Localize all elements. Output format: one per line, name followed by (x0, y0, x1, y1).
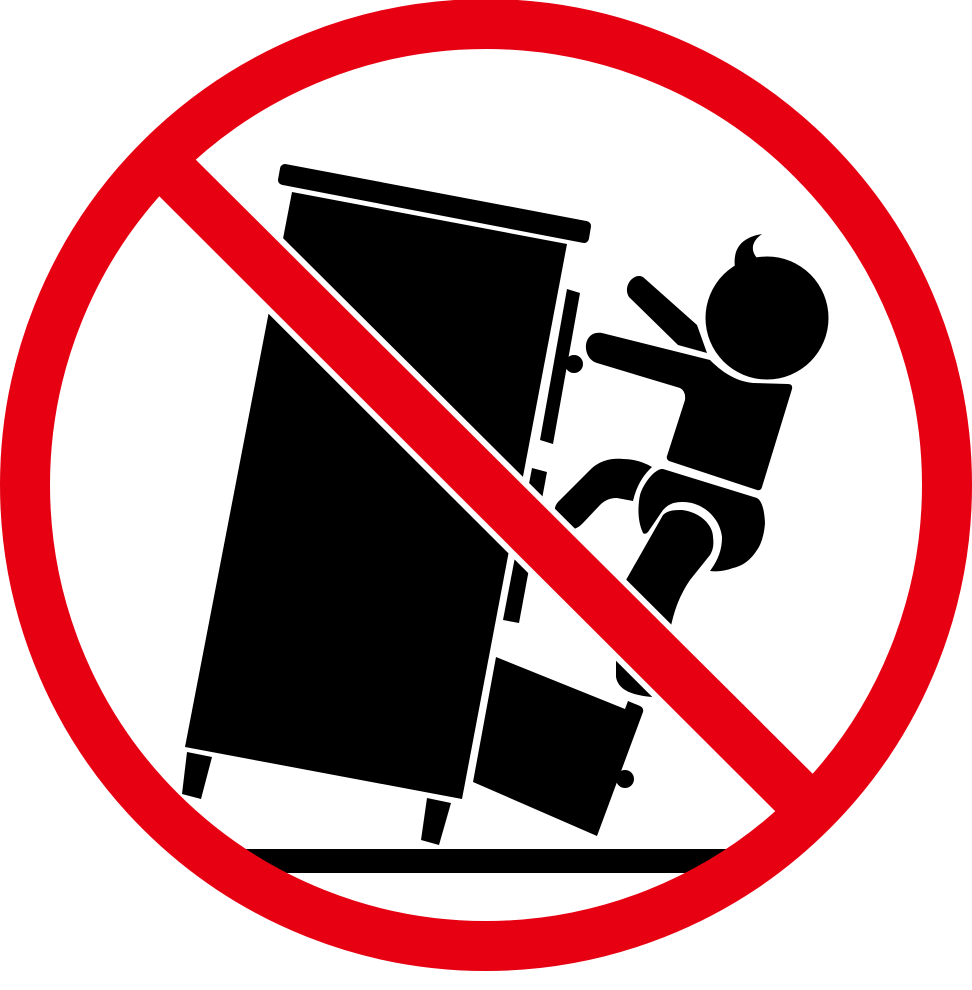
front arm and torso (586, 333, 792, 490)
cabinet body (185, 192, 567, 799)
hair tuft (735, 234, 762, 268)
upper door knob (565, 355, 583, 373)
rear leg (555, 459, 652, 529)
slash white outline (142, 143, 830, 829)
foot (616, 640, 665, 697)
right cabinet leg (421, 798, 451, 845)
head (706, 256, 828, 380)
drawer knob (616, 770, 634, 788)
climbing child (555, 234, 828, 697)
open drawer (473, 657, 643, 836)
left cabinet leg (182, 752, 212, 799)
lower door edge (503, 468, 547, 623)
upper door edge (540, 289, 580, 444)
prohibition slash (142, 143, 830, 829)
pants (638, 469, 765, 571)
front leg (610, 510, 713, 640)
slash red bar (142, 143, 830, 829)
floor (240, 849, 730, 873)
back arm (627, 276, 707, 353)
cabinet top plate (283, 169, 586, 238)
tipping cabinet (182, 169, 643, 845)
